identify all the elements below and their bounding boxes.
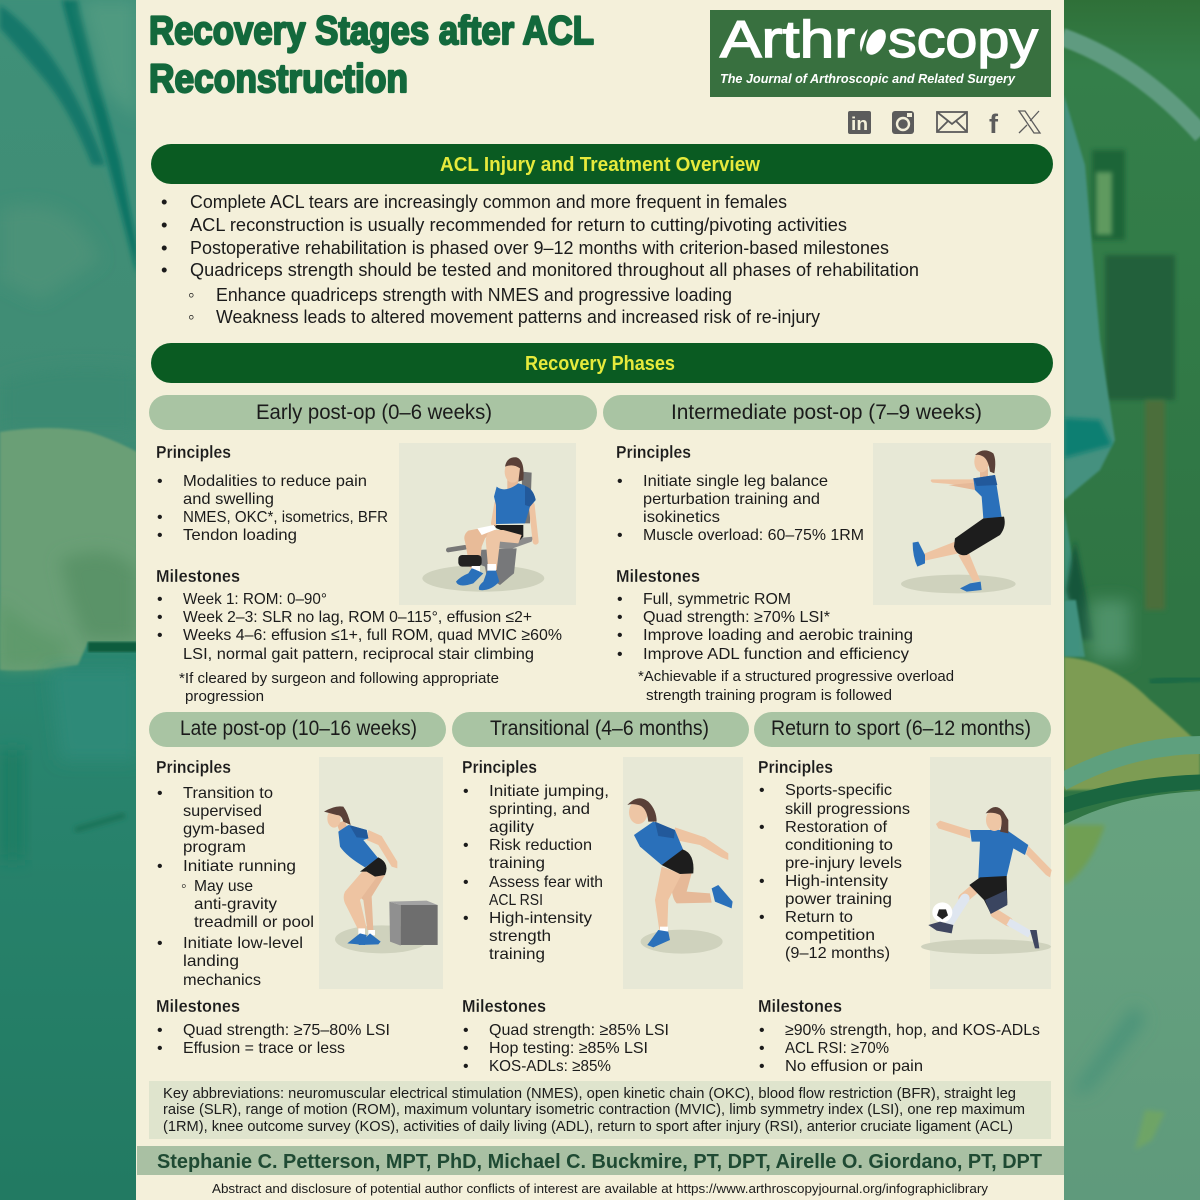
milestones: • — [463, 1040, 469, 1057]
principles — [156, 757, 314, 989]
principles: • — [617, 473, 623, 490]
milestones: Weeks 4–6: effusion ≤1+, full ROM, quad MVIC ≥60% — [183, 627, 562, 644]
principles: agility — [489, 819, 534, 836]
principles: • — [157, 785, 163, 802]
overview bullet list: • — [161, 259, 167, 280]
milestones: • — [463, 1022, 469, 1039]
milestones: • — [617, 591, 623, 608]
milestones: No effusion or pain — [785, 1058, 923, 1075]
principles: and swelling — [183, 491, 274, 508]
principles: Initiate running — [183, 858, 296, 875]
phase heading: Return to sport (6–12 months) — [771, 717, 1031, 740]
milestones: • — [157, 609, 163, 626]
principles: gym-based — [183, 821, 265, 838]
milestones — [156, 566, 562, 663]
overview bullet list: ACL reconstruction is usually recommended for return to cutting/pivoting activities — [190, 214, 847, 235]
principles: ◦ — [181, 878, 187, 895]
principles: Transition to — [183, 785, 273, 802]
milestones — [758, 996, 1040, 1075]
overview bullet list: ◦ — [188, 284, 195, 305]
overview bullet list: ◦ — [188, 306, 195, 327]
principles: • — [463, 783, 469, 800]
phase heading — [603, 395, 1051, 430]
photo background: left side — [0, 0, 137, 1200]
principles: power training — [785, 891, 892, 908]
principles: • — [759, 873, 765, 890]
footnote: strength training program is followed — [646, 688, 892, 704]
principles: Return to — [785, 909, 853, 926]
milestones: Hop testing: ≥85% LSI — [489, 1040, 648, 1057]
icon: email — [937, 112, 967, 132]
principles: supervised — [183, 803, 262, 820]
overview bullet list — [161, 191, 919, 327]
phase heading — [754, 712, 1051, 747]
principles: Initiate single leg balance — [643, 473, 828, 490]
principles — [156, 442, 388, 544]
illustration: single leg squat — [873, 443, 1051, 605]
illustration: soccer player — [921, 757, 1052, 989]
abbreviations box: Key abbreviations: neuromuscular electrical stimulation (NMES), open kinetic chain (OKC), blood flow restriction (BFR), straight leg — [163, 1086, 1016, 1102]
milestones: • — [157, 1022, 163, 1039]
overview bullet list: Postoperative rehabilitation is phased over 9–12 months with criterion-based milestones — [190, 237, 889, 258]
principles: • — [759, 819, 765, 836]
milestones — [462, 996, 669, 1075]
milestones: Full, symmetric ROM — [643, 591, 791, 608]
phase heading: Intermediate post-op (7–9 weeks) — [671, 401, 982, 424]
principles: Initiate jumping, — [489, 783, 609, 800]
panel: early post-op — [149, 395, 597, 705]
abbreviations box — [149, 1081, 1051, 1139]
phase heading: Early post-op (0–6 weeks) — [256, 401, 492, 424]
photo background: right side — [1062, 0, 1200, 1200]
principles: isokinetics — [643, 509, 720, 526]
authors band: Stephanie C. Petterson, MPT, PhD, Michael C. Buckmire, PT, DPT, Airelle O. Giordano, PT, DPT — [157, 1151, 1042, 1173]
milestones: • — [617, 609, 623, 626]
principles: Principles — [758, 757, 833, 777]
principles: • — [759, 909, 765, 926]
phase heading — [452, 712, 749, 747]
journal logo: Arthr — [720, 11, 855, 69]
icon: instagram — [892, 111, 914, 134]
principles: skill progressions — [785, 801, 910, 818]
banner: recovery phases — [151, 343, 1053, 383]
footnote — [179, 671, 499, 705]
milestones: • — [759, 1022, 765, 1039]
milestones: Week 1: ROM: 0–90° — [183, 591, 327, 608]
principles: (9–12 months) — [785, 945, 890, 962]
footnote: *Achievable if a structured progressive overload — [638, 669, 954, 685]
principles: Tendon loading — [183, 527, 297, 544]
panel: late post-op — [149, 712, 446, 1057]
illustration: seated knee extension — [399, 443, 576, 605]
principles: Initiate low-level — [183, 935, 303, 952]
milestones: • — [759, 1058, 765, 1075]
journal logo: The Journal of Arthroscopic and Related Surgery — [720, 72, 1016, 86]
milestones: • — [157, 627, 163, 644]
footnote — [638, 669, 954, 704]
banner: recovery phases: Recovery Phases — [525, 352, 675, 375]
milestones: Milestones — [156, 996, 240, 1016]
principles: Risk reduction — [489, 837, 592, 854]
principles: • — [157, 858, 163, 875]
journal logo — [710, 10, 1051, 97]
principles: mechanics — [183, 972, 261, 989]
milestones: ≥90% strength, hop, and KOS-ADLs — [785, 1022, 1040, 1039]
principles: Sports-specific — [785, 782, 892, 799]
principles: Principles — [616, 442, 691, 462]
paper panel — [136, 0, 1064, 1200]
principles — [462, 757, 609, 963]
milestones: Quad strength: ≥75–80% LSI — [183, 1022, 390, 1039]
social icons — [848, 109, 1040, 139]
principles: competition — [785, 927, 875, 944]
principles: Modalities to reduce pain — [183, 473, 367, 490]
principles: training — [489, 946, 545, 963]
milestones: LSI, normal gait pattern, reciprocal stair climbing — [183, 646, 534, 663]
principles: May use — [194, 878, 253, 895]
principles: • — [617, 527, 623, 544]
principles: • — [463, 837, 469, 854]
principles — [616, 442, 864, 544]
milestones: Effusion = trace or less — [183, 1040, 345, 1057]
footnote: progression — [185, 689, 264, 705]
milestones: • — [157, 1040, 163, 1057]
overview bullet list: • — [161, 214, 167, 235]
phase heading — [149, 395, 597, 430]
milestones: • — [617, 627, 623, 644]
title — [149, 9, 594, 101]
principles: strength — [489, 928, 551, 945]
title: Recovery Stages after ACL — [149, 9, 594, 53]
icon: linkedin — [848, 111, 871, 134]
milestones: Milestones — [462, 996, 546, 1016]
journal logo: scopy — [888, 11, 1038, 69]
milestones: Quad strength: ≥85% LSI — [489, 1022, 669, 1039]
icon: X — [1019, 111, 1040, 133]
principles: • — [759, 782, 765, 799]
principles: landing — [183, 953, 239, 970]
abbreviations box: (1RM), knee outcome survey (KOS), activities of daily living (ADL), return to sport after injury (RSI), anterior cruciate ligament (ACL) — [163, 1119, 1013, 1135]
phase heading — [149, 712, 446, 747]
principles: anti-gravity — [194, 896, 277, 913]
milestones: Week 2–3: SLR no lag, ROM 0–115°, effusion ≤2+ — [183, 609, 532, 626]
overview bullet list: Complete ACL tears are increasingly common and more frequent in females — [190, 191, 787, 212]
milestones: • — [617, 646, 623, 663]
milestones: Milestones — [156, 566, 240, 586]
milestones: Quad strength: ≥70% LSI* — [643, 609, 830, 626]
principles: • — [157, 935, 163, 952]
illustration: box squat — [319, 757, 443, 989]
principles: Assess fear with — [489, 874, 603, 891]
principles: treadmill or pool — [194, 914, 314, 931]
principles: Muscle overload: 60–75% 1RM — [643, 527, 864, 544]
milestones — [616, 566, 913, 663]
principles: pre-injury levels — [785, 855, 902, 872]
milestones — [156, 996, 390, 1057]
principles: perturbation training and — [643, 491, 820, 508]
panel: transitional — [452, 712, 749, 1075]
phase heading: Transitional (4–6 months) — [490, 717, 709, 740]
principles: • — [463, 874, 469, 891]
principles: sprinting, and — [489, 801, 590, 818]
principles: High-intensity — [489, 910, 592, 927]
principles: • — [157, 473, 163, 490]
milestones: • — [759, 1040, 765, 1057]
principles: NMES, OKC*, isometrics, BFR — [183, 509, 388, 526]
panel: intermediate post-op — [603, 395, 1051, 704]
illustration: running figure — [623, 757, 743, 989]
icon: facebook: f — [989, 109, 999, 139]
banner: overview: ACL Injury and Treatment Overview — [440, 153, 760, 176]
principles: training — [489, 855, 545, 872]
overview bullet list: • — [161, 237, 167, 258]
milestones: Milestones — [616, 566, 700, 586]
overview bullet list: Weakness leads to altered movement patterns and increased risk of re-injury — [216, 306, 821, 327]
principles: • — [157, 527, 163, 544]
phase heading: Late post-op (10–16 weeks) — [180, 717, 417, 740]
principles: conditioning to — [785, 837, 893, 854]
milestones: ACL RSI: ≥70% — [785, 1040, 889, 1057]
overview bullet list: Enhance quadriceps strength with NMES and progressive loading — [216, 284, 732, 305]
milestones: Improve ADL function and efficiency — [643, 646, 909, 663]
principles: Principles — [156, 442, 231, 462]
principles: High-intensity — [785, 873, 888, 890]
title: Reconstruction — [149, 57, 408, 101]
milestones: • — [463, 1058, 469, 1075]
principles: Principles — [156, 757, 231, 777]
milestones: Improve loading and aerobic training — [643, 627, 913, 644]
icon: linkedin: in — [851, 114, 868, 134]
milestones: KOS-ADLs: ≥85% — [489, 1058, 611, 1075]
principles: ACL RSI — [489, 892, 543, 909]
milestones: • — [157, 591, 163, 608]
footnote: *If cleared by surgeon and following appropriate — [179, 671, 499, 687]
milestones: Milestones — [758, 996, 842, 1016]
principles: • — [463, 910, 469, 927]
abbreviations box: raise (SLR), range of motion (ROM), maximum voluntary isometric contraction (MVIC), limb symmetry index (LSI), one rep maximum — [163, 1102, 1025, 1118]
principles — [758, 757, 910, 962]
overview bullet list: • — [161, 191, 167, 212]
principles: Restoration of — [785, 819, 888, 836]
banner: overview — [151, 144, 1053, 184]
overview bullet list: Quadriceps strength should be tested and monitored throughout all phases of rehabilitation — [190, 259, 919, 280]
panel: return to sport — [754, 712, 1052, 1075]
principles: program — [183, 839, 246, 856]
principles: • — [157, 509, 163, 526]
footer disclosure: Abstract and disclosure of potential author conflicts of interest are available at https://www.arthroscopyjournal.org/infographiclibrary — [212, 1181, 989, 1196]
principles: Principles — [462, 757, 537, 777]
